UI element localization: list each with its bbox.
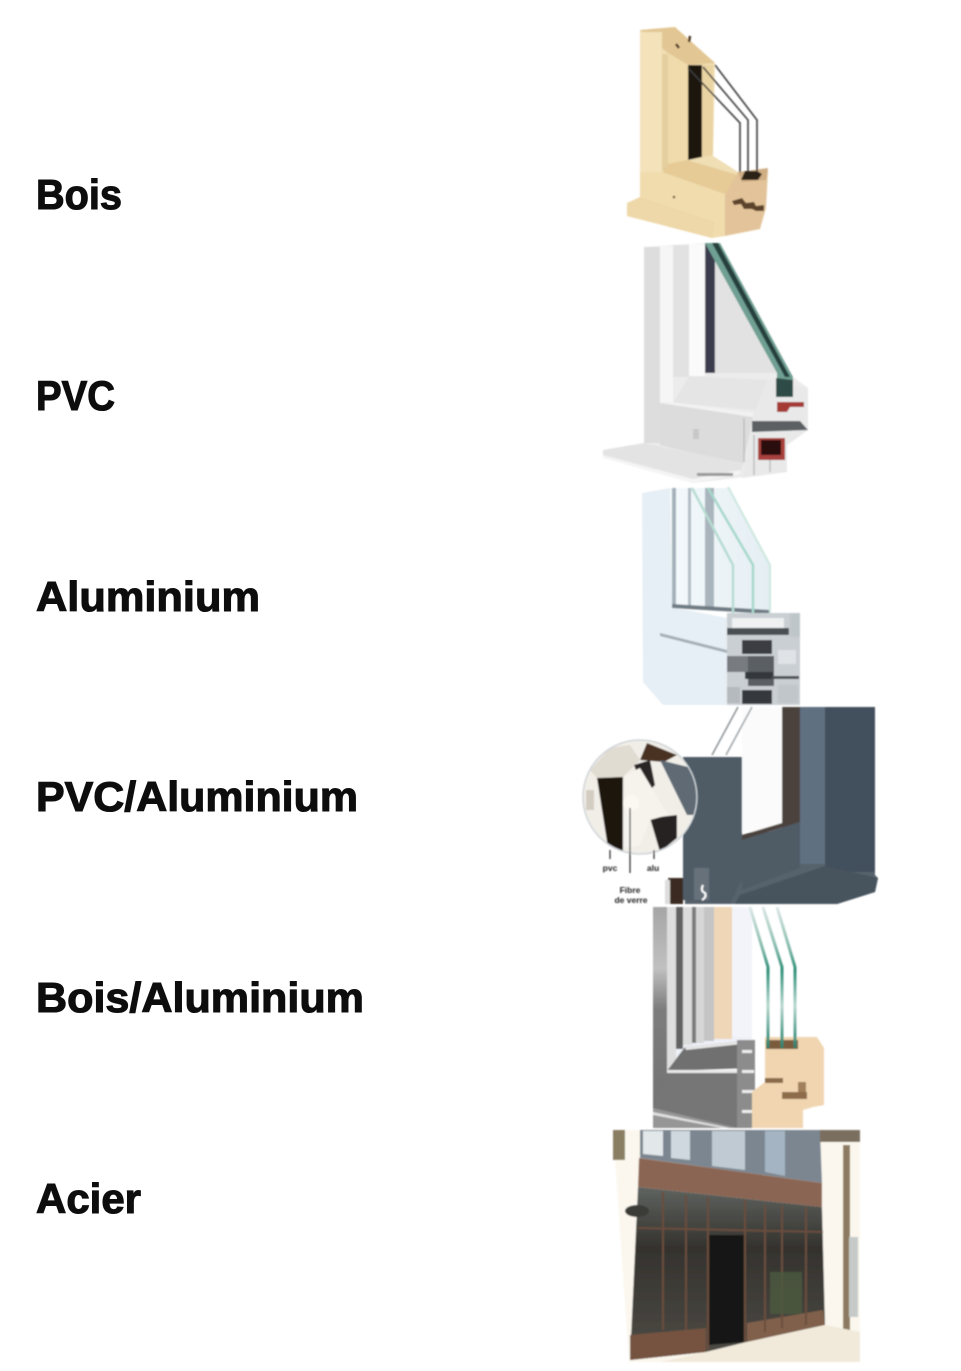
icon: magnified PVC/aluminium detail <box>583 740 700 905</box>
label: Bois: Bois <box>36 171 122 218</box>
image: wood/aluminium window section <box>653 907 824 1128</box>
label: Acier: Acier <box>36 1175 141 1222</box>
text: component captions: alu <box>647 863 659 873</box>
image: steel shopfront photo <box>613 1130 860 1362</box>
text: component captions: pvc <box>603 863 618 873</box>
text: component captions: Fibre <box>620 885 641 895</box>
label: PVC: PVC <box>36 372 115 419</box>
image: wood window section <box>627 27 768 238</box>
label: PVC/Aluminium: PVC/Aluminium <box>36 773 358 820</box>
label: Bois/Aluminium: Bois/Aluminium <box>36 974 364 1021</box>
text: component captions <box>603 863 659 905</box>
label: Aluminium: Aluminium <box>36 573 260 620</box>
image: PVC/aluminium window section <box>665 707 878 904</box>
image: PVC window section <box>603 243 808 483</box>
image: aluminium window section <box>642 487 800 705</box>
text: component captions: de verre <box>614 895 648 905</box>
